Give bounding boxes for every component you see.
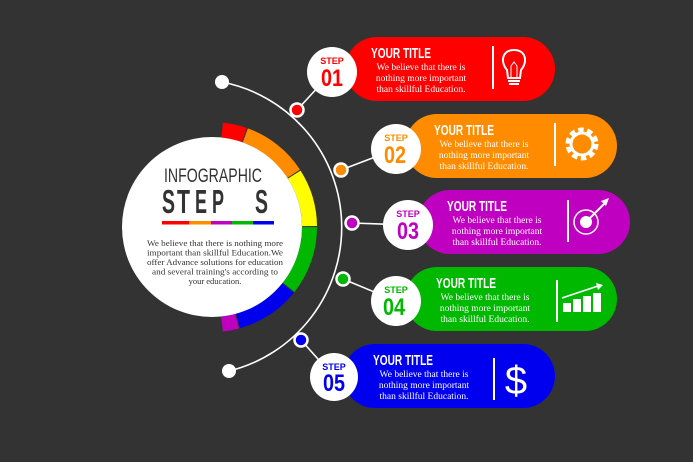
step 2: 02 <box>384 142 406 169</box>
step 5: We believe that there is <box>380 370 469 380</box>
color bar <box>162 221 274 224</box>
step 3 <box>383 190 630 254</box>
step 5: 05 <box>323 370 345 397</box>
step 1: 01 <box>321 65 343 92</box>
icon: target <box>574 198 609 234</box>
step 5: STEP <box>322 362 346 372</box>
heading: STEP S: S <box>255 183 268 220</box>
heading: STEP S: E <box>195 183 207 220</box>
step 4: than skillful Education. <box>441 314 529 325</box>
step 2: STEP <box>384 133 408 143</box>
icon: bulb <box>503 50 525 84</box>
step 1: YOUR TITLE <box>371 45 431 62</box>
step 5 <box>310 344 555 408</box>
step 3: nothing more important <box>452 227 542 237</box>
step 2: YOUR TITLE <box>434 122 494 139</box>
step 1 <box>307 37 555 101</box>
heading: STEP S: T <box>177 183 190 220</box>
description: important than skillful Education.We <box>147 248 283 258</box>
step 4: YOUR TITLE <box>436 275 496 292</box>
step 1: nothing more important <box>376 74 466 84</box>
heading: STEP S <box>162 183 268 220</box>
step 1: We believe that there is <box>377 63 466 73</box>
heading: STEP S: S <box>162 183 175 220</box>
step 3: 03 <box>397 218 419 245</box>
step 4: We believe that there is <box>441 293 530 303</box>
step 4: nothing more important <box>440 304 530 314</box>
step 5: nothing more important <box>379 381 469 391</box>
heading: STEP S: P <box>212 183 224 220</box>
step 2: than skillful Education. <box>440 161 528 172</box>
step 2: nothing more important <box>439 151 529 161</box>
step 2 <box>371 114 617 178</box>
step 3: than skillful Education. <box>453 237 541 248</box>
icon: gear <box>569 131 595 157</box>
step 3: STEP <box>396 209 420 219</box>
step 5: YOUR TITLE <box>373 352 433 369</box>
description: We believe that there is nothing more <box>147 238 283 248</box>
description <box>147 238 284 286</box>
icon: dollar: $ <box>505 359 527 403</box>
step 5: than skillful Education. <box>380 391 468 402</box>
step 3: YOUR TITLE <box>447 198 507 215</box>
step 3: We believe that there is <box>453 216 542 226</box>
step 1: STEP <box>320 56 344 66</box>
step 1: than skillful Education. <box>377 84 465 95</box>
description: your education. <box>189 276 241 286</box>
step 4: 04 <box>383 294 406 321</box>
step 4: STEP <box>384 285 408 295</box>
heading: INFOGRAPHIC <box>164 166 262 187</box>
step 2: We believe that there is <box>440 140 529 150</box>
colored ring <box>114 130 310 324</box>
center circle <box>122 137 302 317</box>
connector arc <box>215 72 408 378</box>
description: and several training's according to <box>152 266 278 276</box>
step 4 <box>371 267 617 331</box>
description: offer Advance solutions for education <box>147 257 284 267</box>
icon: chart <box>562 283 603 312</box>
